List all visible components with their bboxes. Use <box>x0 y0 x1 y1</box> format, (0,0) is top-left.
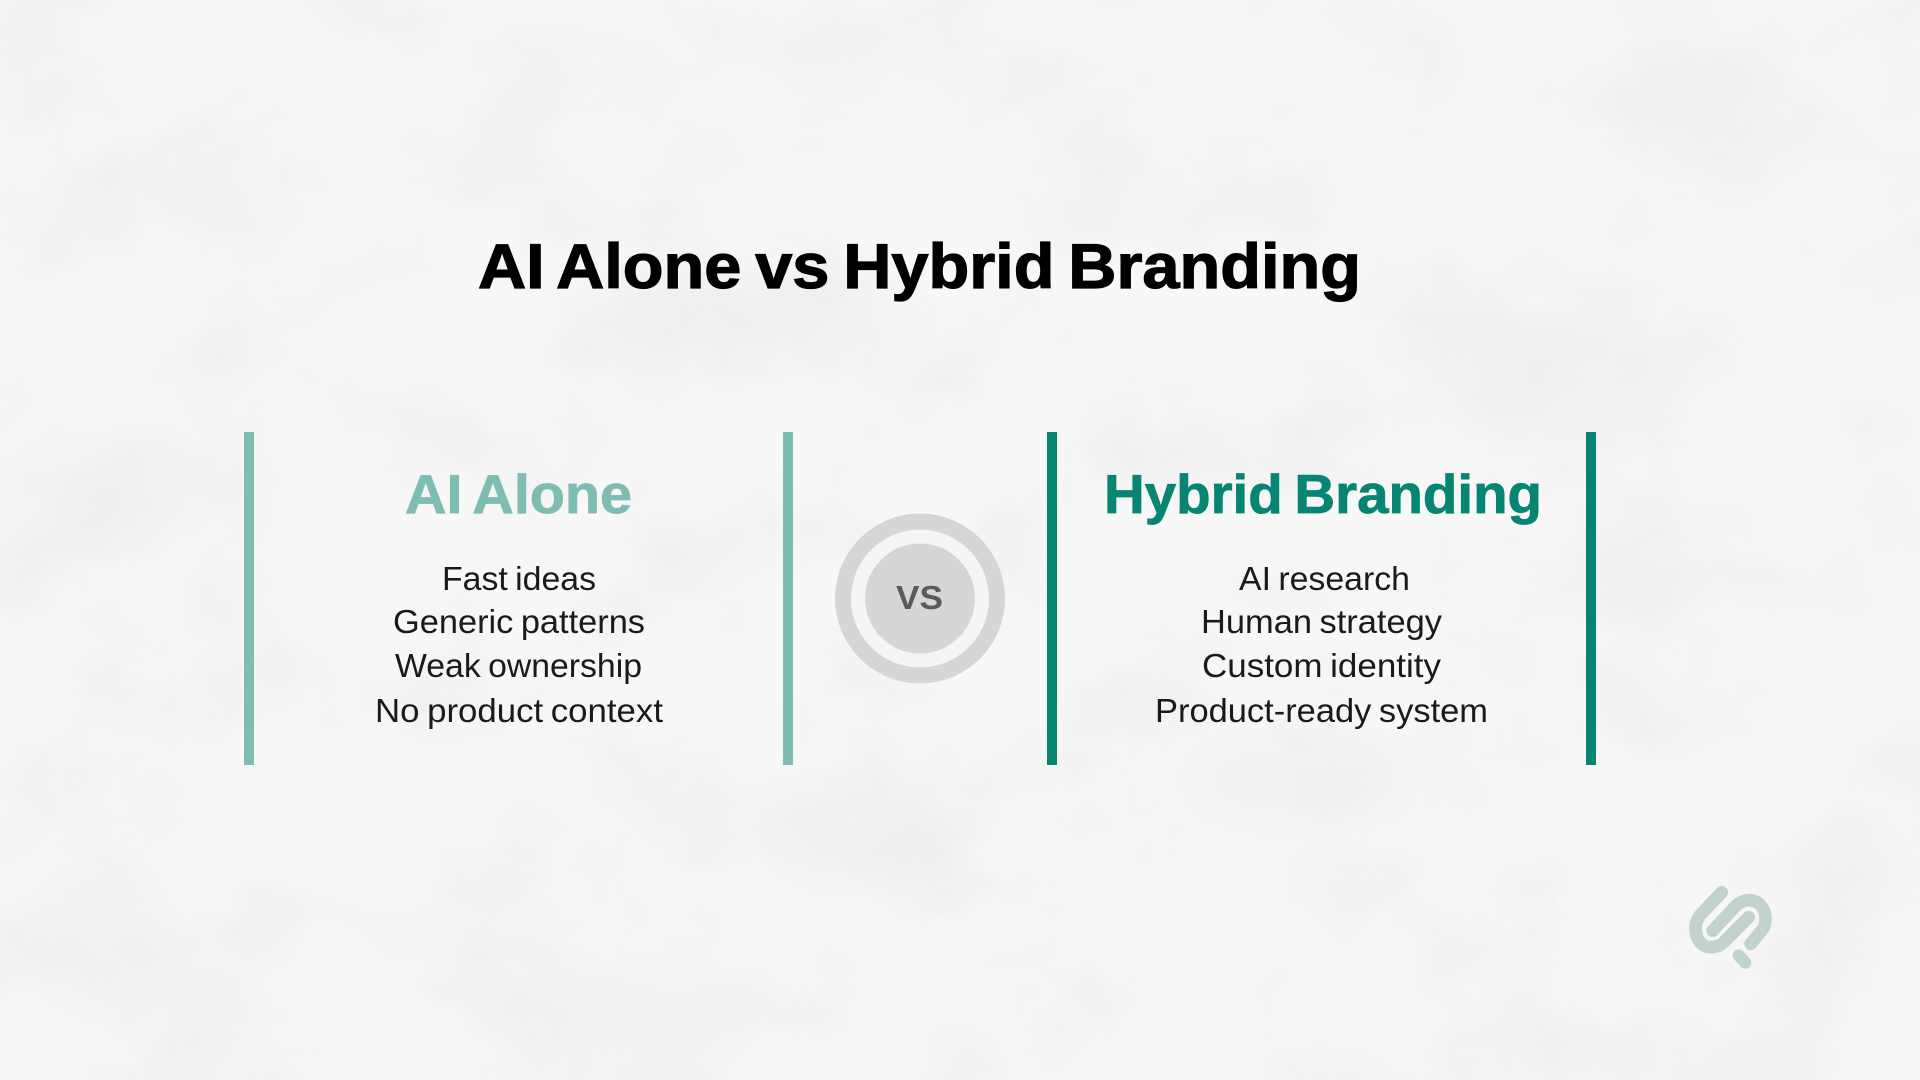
vs badge <box>835 514 1005 684</box>
panel: AI Alone <box>244 432 793 765</box>
right bar: Hybrid Branding <box>1586 432 1596 765</box>
icon: brand logo <box>1696 892 1766 963</box>
list: AI Alone traits: Generic patterns <box>393 603 645 640</box>
list: Hybrid Branding traits: Product-ready system <box>1155 692 1488 729</box>
vs badge: VS <box>896 579 943 616</box>
heading: Hybrid Branding: Hybrid Branding <box>1104 463 1542 525</box>
list: AI Alone traits: No product context <box>375 692 663 729</box>
left bar: AI Alone <box>244 432 254 765</box>
list: Hybrid Branding traits: Custom identity <box>1202 647 1442 684</box>
panel: Hybrid Branding <box>1047 432 1596 765</box>
list: AI Alone traits: Weak ownership <box>395 647 642 684</box>
list: Hybrid Branding traits: Human strategy <box>1201 603 1443 640</box>
list: Hybrid Branding traits: AI research <box>1239 560 1410 597</box>
list: Hybrid Branding traits <box>1155 560 1488 729</box>
list: AI Alone traits: Fast ideas <box>442 560 596 597</box>
left bar: Hybrid Branding <box>1047 432 1057 765</box>
heading: AI Alone: AI Alone <box>405 463 632 525</box>
right bar: AI Alone <box>783 432 793 765</box>
list: AI Alone traits <box>375 560 663 729</box>
title: AI Alone vs Hybrid Branding <box>478 232 1361 302</box>
